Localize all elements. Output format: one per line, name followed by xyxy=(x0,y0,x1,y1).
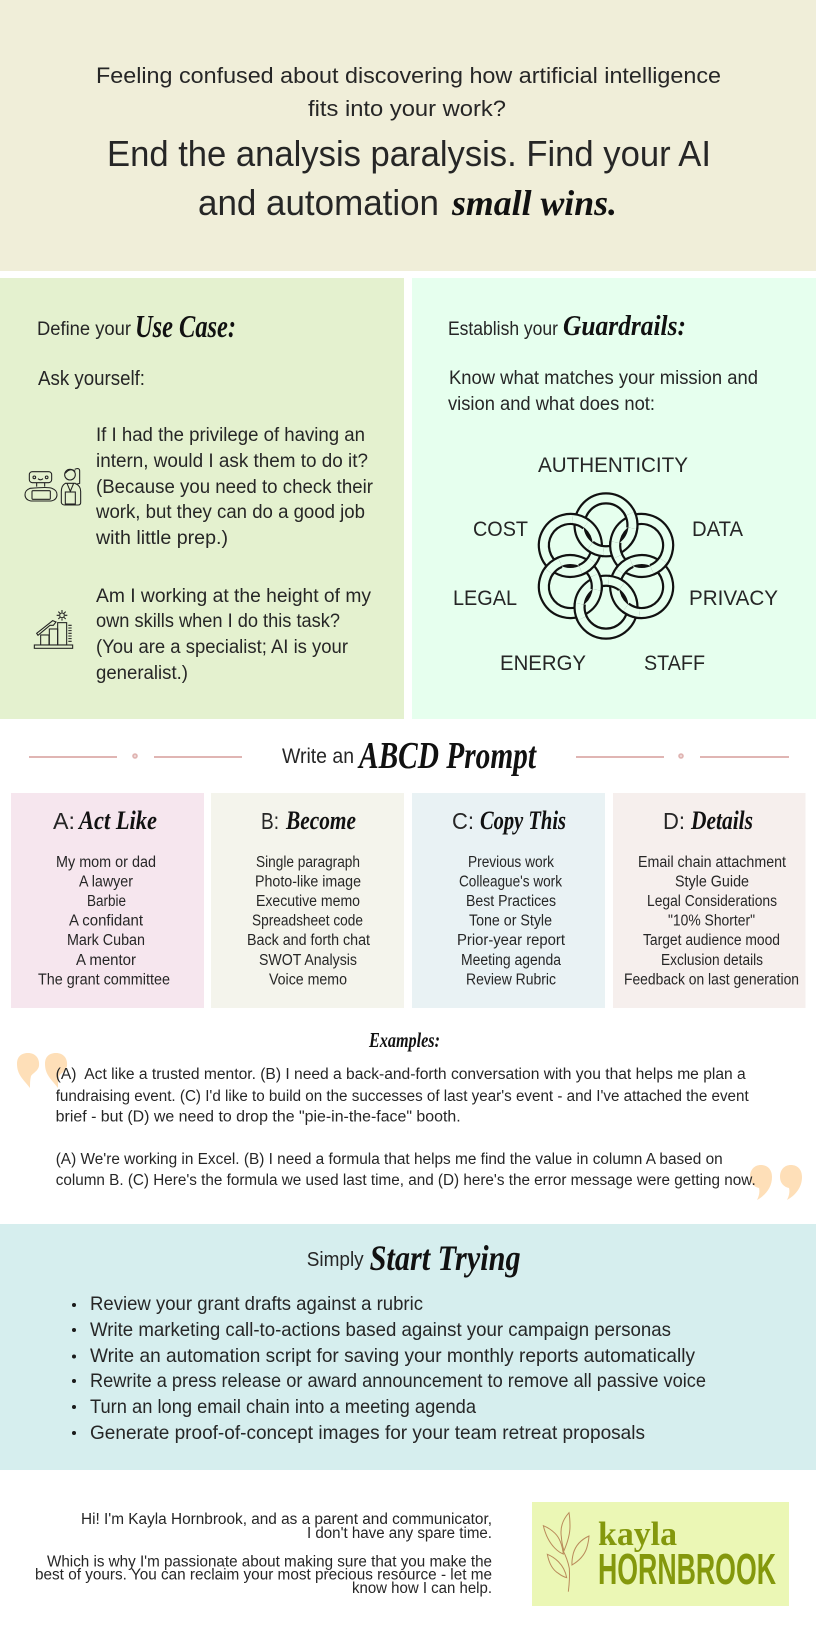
list: D items: Exclusion details xyxy=(661,952,763,969)
list: D items: Legal Considerations xyxy=(647,893,777,910)
text: first example: brief - but (D) we need to drop the "pie-in-the-face" booth. xyxy=(56,1108,461,1126)
text: author bio: best of yours. You can reclaim your most precious resource - let me xyxy=(35,1566,492,1584)
panel: C copy this xyxy=(412,793,605,1008)
panel: define your use case xyxy=(0,278,404,719)
text: intern question: with little prep.) xyxy=(95,528,228,549)
labels: guardrail topics xyxy=(453,454,778,675)
panel: simply start trying xyxy=(0,1224,816,1470)
text: intern question xyxy=(95,425,374,549)
text: ask yourself: Ask yourself: xyxy=(38,368,145,390)
list: B items: Spreadsheet code xyxy=(252,912,363,930)
panel: A act like xyxy=(11,793,204,1008)
heading: write an ABCD prompt: Write an xyxy=(282,745,354,768)
text: second example: column B. (C) Here's the formula we used last time, and (D) here's the error message were getting now. xyxy=(56,1172,756,1189)
text: kayla: kayla xyxy=(598,1516,677,1553)
heading: D: D: xyxy=(663,808,685,834)
list: things to try: Write marketing call-to-actions based against your campaign personas xyxy=(90,1319,671,1341)
heading: guardrails: Establish your xyxy=(448,319,559,340)
heading: examples: Examples: xyxy=(368,1028,440,1052)
labels: guardrail topics: PRIVACY xyxy=(689,587,778,610)
heading: B xyxy=(261,806,356,835)
labels: guardrail topics: ENERGY xyxy=(500,652,586,675)
list: A items: Mark Cuban xyxy=(67,932,145,949)
list: A items: A mentor xyxy=(76,952,136,969)
heading: guardrails xyxy=(448,310,686,342)
list: things to try: Turn an long email chain into a meeting agenda xyxy=(90,1396,476,1418)
main title: End the analysis paralysis. Find your AI xyxy=(107,133,711,174)
heading: start trying xyxy=(307,1238,521,1278)
icon: closing quote xyxy=(750,1165,802,1200)
panel: header xyxy=(0,0,816,271)
text: first example xyxy=(56,1066,749,1126)
panel: D details xyxy=(613,793,806,1008)
list: D items: Target audience mood xyxy=(643,932,780,949)
text: guardrails intro xyxy=(448,368,758,415)
heading: use case: Use Case: xyxy=(135,308,236,344)
intro text xyxy=(96,63,721,121)
list: D items xyxy=(624,854,799,988)
list: things to try: Review your grant drafts against a rubric xyxy=(90,1293,423,1315)
main title: small wins. xyxy=(451,183,617,223)
labels: guardrail topics: AUTHENTICITY xyxy=(538,454,688,477)
list: B items: Single paragraph xyxy=(256,854,360,871)
heading: B: Become xyxy=(285,806,356,835)
text: skills question: (You are a specialist; AI is your xyxy=(96,637,349,658)
text: intern question: intern, would I ask them to do it? xyxy=(96,451,368,472)
list: A items: My mom or dad xyxy=(56,854,156,871)
icon: leaf sprig xyxy=(543,1513,589,1592)
text: skills question: generalist.) xyxy=(96,663,188,684)
text: guardrails intro: Know what matches your mission and xyxy=(449,368,758,389)
list: A items xyxy=(38,854,170,988)
icon: robot and intern xyxy=(25,469,81,505)
icon: opening quote xyxy=(17,1053,67,1088)
heading: B: B: xyxy=(261,808,279,834)
heading: C: C: xyxy=(452,808,474,834)
list: B items: Back and forth chat xyxy=(247,932,371,949)
list: D items: Style Guide xyxy=(675,874,749,890)
main title xyxy=(107,133,711,223)
text: author bio: Hi! I'm Kayla Hornbrook, and as a parent and communicator, xyxy=(81,1511,492,1528)
list: things to try: Write an automation script for saving your monthly reports automatically xyxy=(90,1345,695,1367)
labels: guardrail topics: DATA xyxy=(692,518,743,541)
text: guardrails intro: vision and what does not: xyxy=(448,394,655,415)
text: skills question: own skills when I do this task? xyxy=(96,611,340,632)
list: C items: Best Practices xyxy=(466,893,556,910)
list: C items: Colleague's work xyxy=(459,874,562,890)
main title: and automation xyxy=(198,182,439,223)
list: A items: The grant committee xyxy=(38,972,170,988)
text: author bio xyxy=(35,1511,492,1597)
list: things to try: Generate proof-of-concept images for your team retreat proposals xyxy=(90,1422,645,1444)
heading: D: Details xyxy=(690,806,753,835)
text: author bio: I don't have any spare time. xyxy=(307,1525,492,1542)
list: B items: Voice memo xyxy=(269,972,347,988)
logo: kayla hornbrook xyxy=(532,1502,789,1606)
list: C items: Tone or Style xyxy=(469,912,552,930)
text: intern question: work, but they can do a good job xyxy=(95,502,365,523)
list: things to try xyxy=(72,1293,706,1444)
list: C items xyxy=(457,854,566,988)
heading: C xyxy=(452,806,566,835)
section: examples xyxy=(17,1028,802,1200)
icon: growth chart xyxy=(34,610,73,648)
heading: start trying: Simply xyxy=(307,1249,364,1271)
list: D items: Feedback on last generation xyxy=(624,972,799,988)
text: first example: fundraising event. (C) I'd like to build on the successes of last year's event - and I've attached the event xyxy=(56,1088,749,1105)
heading: use case xyxy=(37,308,236,344)
list: A items: A confidant xyxy=(69,912,144,930)
heading: write an ABCD prompt: ABCD Prompt xyxy=(357,735,537,777)
list: A items: Barbie xyxy=(87,893,126,910)
heading: D xyxy=(663,806,753,835)
heading: write an ABCD prompt xyxy=(29,735,789,777)
heading: C: Copy This xyxy=(480,806,566,835)
list: B items: SWOT Analysis xyxy=(259,952,357,969)
icon: interlocking rings xyxy=(534,498,678,634)
heading: start trying: Start Trying xyxy=(370,1238,521,1278)
list: things to try: Rewrite a press release or award announcement to remove all passive voice xyxy=(90,1370,706,1392)
text: second example xyxy=(56,1151,756,1189)
text: intern question: If I had the privilege of having an xyxy=(96,425,365,446)
intro text: fits into your work? xyxy=(308,96,506,121)
panel: establish your guardrails xyxy=(412,278,816,719)
heading: A: A: xyxy=(53,808,75,834)
list: B items xyxy=(247,854,371,988)
panel: B become xyxy=(211,793,404,1008)
heading: use case: Define your xyxy=(37,319,132,340)
list: B items: Executive memo xyxy=(256,893,360,910)
text: first example: (A) Act like a trusted mentor. (B) I need a back-and-forth conversation with you that helps me plan a xyxy=(56,1066,746,1083)
list: A items: A lawyer xyxy=(79,874,133,890)
heading: A xyxy=(53,806,157,835)
list: B items: Photo-like image xyxy=(255,874,361,890)
list: D items: "10% Shorter" xyxy=(668,912,755,930)
labels: guardrail topics: COST xyxy=(473,518,528,541)
text: second example: (A) We're working in Excel. (B) I need a formula that helps me find the value in column A based on xyxy=(56,1151,723,1168)
text: intern question: (Because you need to check their xyxy=(96,477,374,498)
text: author bio: know how I can help. xyxy=(352,1580,492,1597)
heading: A: Act Like xyxy=(77,806,157,835)
text: skills question: Am I working at the height of my xyxy=(96,586,371,607)
intro text: Feeling confused about discovering how artificial intelligence xyxy=(96,63,721,88)
list: C items: Meeting agenda xyxy=(461,952,561,969)
text: author bio: Which is why I'm passionate about making sure that you make the xyxy=(47,1554,492,1570)
list: C items: Prior-year report xyxy=(457,932,566,949)
text: skills question xyxy=(96,586,371,684)
list: C items: Previous work xyxy=(468,854,554,871)
labels: guardrail topics: LEGAL xyxy=(453,587,517,610)
heading: guardrails: Guardrails: xyxy=(563,310,686,342)
labels: guardrail topics: STAFF xyxy=(644,652,705,675)
list: D items: Email chain attachment xyxy=(638,854,787,871)
list: C items: Review Rubric xyxy=(466,972,556,988)
